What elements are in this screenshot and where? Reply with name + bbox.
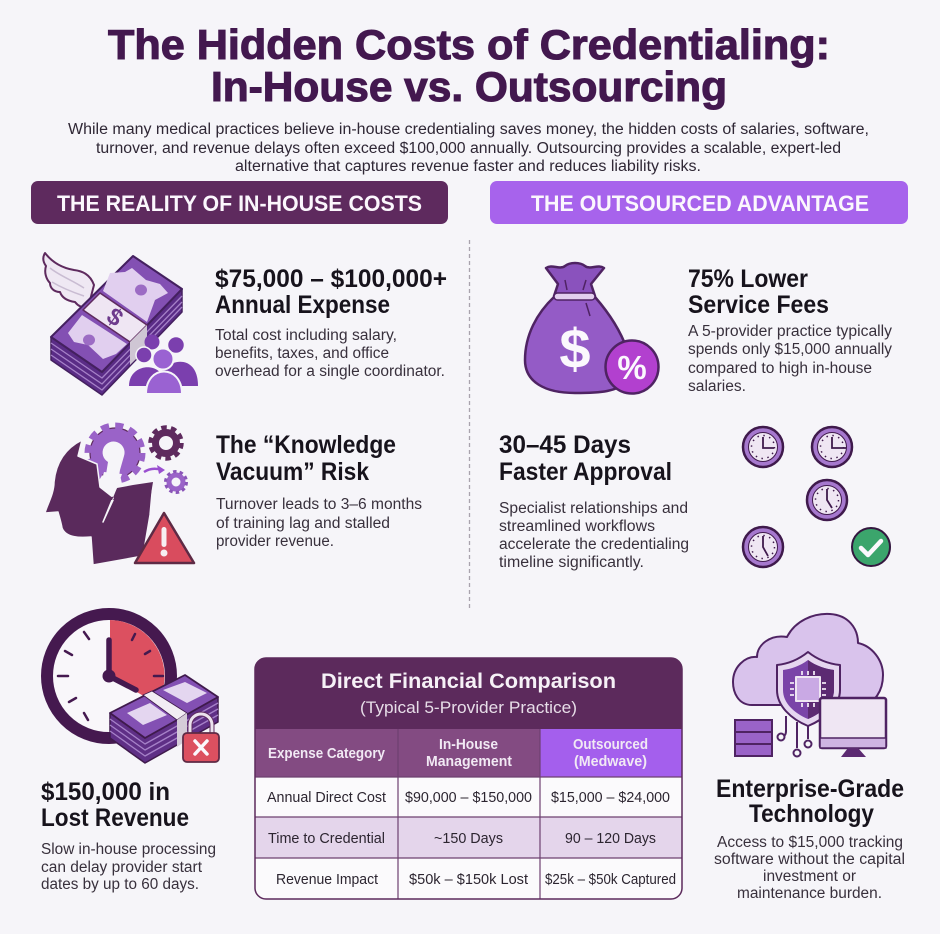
heading: Technology: [749, 800, 874, 828]
body text: investment or: [763, 868, 856, 885]
table title block: [255, 658, 682, 729]
intro paragraph: While many medical practices believe in-house credentialing saves money, the hidden costs of salaries, software,: [68, 121, 869, 138]
body text: A 5-provider practice typically: [688, 323, 892, 340]
row: annual direct cost: $15,000 – $24,000: [551, 790, 670, 806]
body text: dates by up to 60 days.: [41, 876, 199, 893]
panel: lost revenue: [41, 614, 219, 893]
body text: [714, 834, 905, 902]
body text: software without the capital: [714, 851, 905, 868]
panel: lower service fees: [525, 263, 892, 395]
body text: streamlined workflows: [499, 518, 655, 535]
table header row: Expense Category: [268, 746, 385, 762]
row: time to credential: 90 – 120 Days: [565, 831, 656, 847]
body text: Access to $15,000 tracking: [717, 834, 903, 851]
body text: Total cost including salary,: [215, 327, 397, 344]
heading: [499, 431, 672, 486]
table title block: Direct Financial Comparison: [321, 670, 616, 693]
title: In-House vs. Outsourcing: [211, 63, 727, 110]
table header row: Management: [426, 754, 512, 770]
body text: can delay provider start: [41, 859, 203, 876]
table header row: [255, 729, 682, 777]
row: revenue impact: Revenue Impact: [276, 872, 378, 888]
heading: [716, 775, 904, 828]
heading: 75% Lower: [688, 265, 808, 293]
intro paragraph: turnover, and revenue delays often exceed $100,000 annually. Outsourcing provides a scalable, expert-led: [96, 140, 841, 157]
row: time to credential: Time to Credential: [268, 831, 385, 847]
heading: [688, 265, 829, 319]
banner: outsourced advantage: THE OUTSOURCED ADVANTAGE: [531, 191, 869, 216]
heading: 30–45 Days: [499, 431, 631, 459]
heading: Lost Revenue: [41, 804, 189, 832]
banner: outsourced advantage: [490, 181, 908, 224]
icon: clock with locked money: [47, 614, 219, 763]
panel: enterprise technology: [714, 614, 905, 902]
panel: faster approval: [499, 427, 890, 571]
table title block: (Typical 5-Provider Practice): [360, 698, 577, 717]
banner: in-house costs: [31, 181, 448, 224]
body text: compared to high in-house: [688, 360, 872, 377]
body text: Slow in-house processing: [41, 841, 216, 858]
icon: green check: [852, 528, 890, 566]
body text: [215, 327, 445, 380]
row: annual direct cost: [267, 790, 670, 806]
icon: flying money and staff: [43, 253, 198, 395]
body text: of training lag and stalled: [216, 515, 390, 532]
heading: [215, 265, 447, 319]
heading: Faster Approval: [499, 458, 672, 486]
heading: $75,000 – $100,000+: [215, 265, 447, 293]
banner: in-house costs: THE REALITY OF IN-HOUSE COSTS: [57, 191, 422, 216]
table header row: In-House: [439, 737, 498, 753]
icon: money bag with percent badge: %: [617, 349, 647, 386]
heading: [41, 778, 189, 832]
body text: salaries.: [688, 378, 746, 395]
row: revenue impact: [276, 872, 676, 888]
icon: flying money and staff: $: [101, 303, 128, 333]
title: The Hidden Costs of Credentialing:: [108, 21, 830, 68]
icon: money bag with percent badge: [525, 263, 658, 394]
body text: [499, 500, 689, 571]
intro paragraph: alternative that captures revenue faster and reduces liability risks.: [235, 158, 701, 175]
heading: Service Fees: [688, 291, 829, 319]
body text: provider revenue.: [216, 533, 334, 550]
panel: knowledge vacuum: [45, 426, 422, 565]
row: time to credential: ~150 Days: [434, 831, 503, 847]
table header row: (Medwave): [574, 754, 647, 770]
intro paragraph: [68, 121, 869, 175]
body text: timeline significantly.: [499, 554, 644, 571]
body text: accelerate the credentialing: [499, 536, 689, 553]
row: time to credential: [268, 831, 656, 847]
body text: Turnover leads to 3–6 months: [216, 496, 422, 513]
title: [108, 21, 830, 110]
body text: maintenance burden.: [737, 885, 882, 902]
heading: Annual Expense: [215, 291, 390, 319]
row: time to credential band: [255, 817, 682, 858]
row: annual direct cost: Annual Direct Cost: [267, 790, 386, 806]
heading: Vacuum” Risk: [216, 458, 369, 486]
body text: [688, 323, 892, 395]
body text: spends only $15,000 annually: [688, 341, 892, 358]
panel: comparison table: [255, 658, 682, 899]
row: revenue impact: $50k – $150k Lost: [409, 872, 528, 888]
heading: Enterprise-Grade: [716, 775, 904, 803]
body text: [216, 496, 422, 550]
body text: [41, 841, 216, 893]
icon: money bag with percent badge: $: [559, 317, 591, 380]
body text: benefits, taxes, and office: [215, 345, 389, 362]
heading: $150,000 in: [41, 778, 170, 806]
row: revenue impact: $25k – $50k Captured: [545, 872, 676, 888]
body text: Specialist relationships and: [499, 500, 688, 517]
row: annual direct cost: $90,000 – $150,000: [405, 790, 532, 806]
icon: cloud, shield, server and monitor: [733, 614, 886, 757]
body text: overhead for a single coordinator.: [215, 363, 445, 380]
heading: [216, 431, 396, 486]
table header row: Outsourced: [573, 737, 648, 753]
heading: The “Knowledge: [216, 431, 396, 459]
icon: fractured head with gears and warning: [45, 426, 194, 565]
panel: annual expense: [43, 253, 447, 395]
icon: clocks: [743, 427, 852, 567]
table body: [255, 658, 682, 899]
